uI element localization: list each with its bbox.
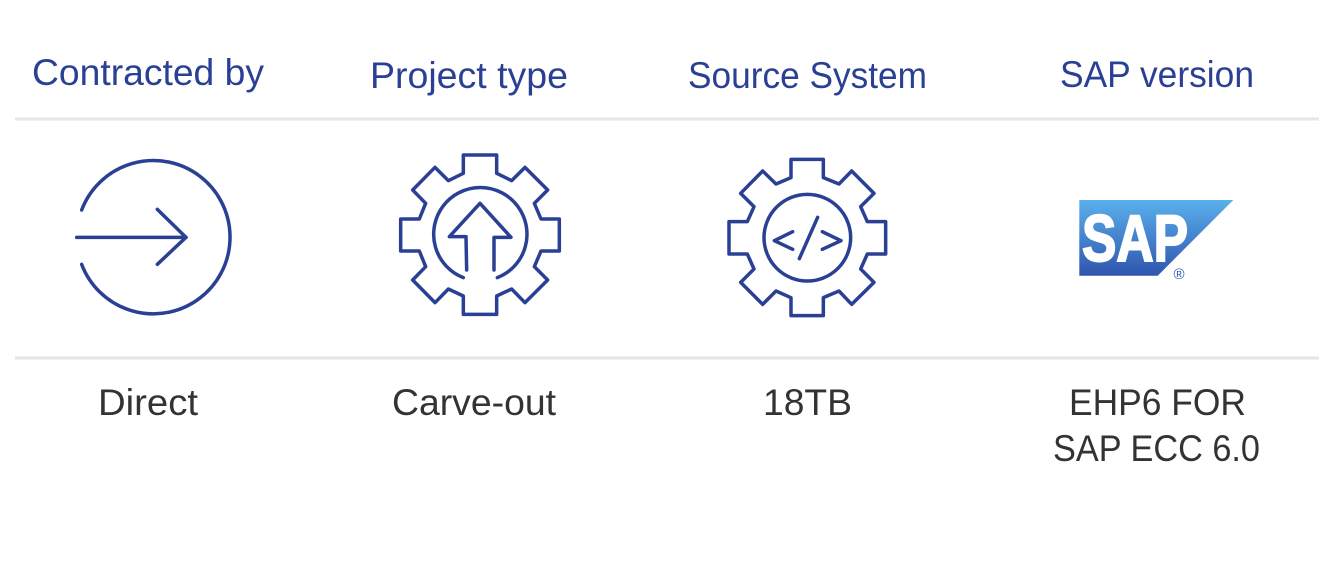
heading: Project type: Project type [370, 55, 568, 96]
icon: SAP logo: ® [1174, 266, 1185, 283]
icon: gear with code brackets [729, 159, 886, 316]
icon: SAP logo: SAP [1082, 201, 1188, 275]
icon: circle with entry arrow [77, 160, 230, 314]
icon: gear with up arrow [401, 155, 559, 314]
value: EHP6 FOR SAP ECC 6.0 [1053, 382, 1260, 469]
value: Carve-out: Carve-out [392, 382, 557, 423]
heading: Contracted by: Contracted by [32, 52, 264, 93]
heading: SAP version: SAP version [1060, 54, 1254, 95]
value: Direct: Direct [98, 382, 199, 423]
heading: Source System: Source System [688, 55, 927, 96]
value: 18TB: 18TB [763, 382, 852, 423]
value: EHP6 FOR SAP ECC 6.0: EHP6 FOR [1069, 382, 1246, 423]
value: EHP6 FOR SAP ECC 6.0: SAP ECC 6.0 [1053, 428, 1260, 469]
